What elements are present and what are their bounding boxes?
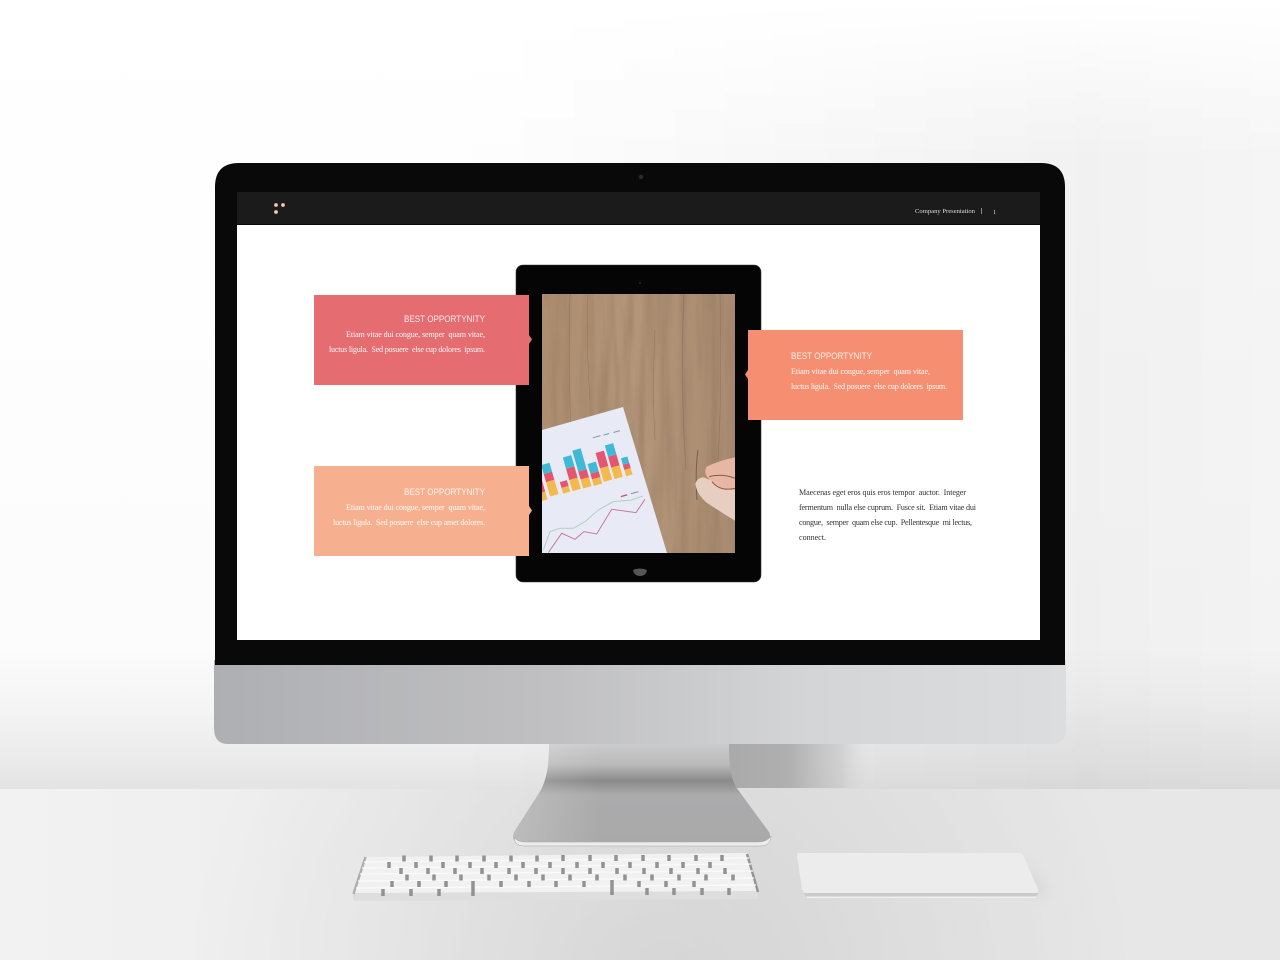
heading: BEST OPPORTYNITY: [791, 351, 872, 361]
logo dots: [274, 203, 285, 214]
trackpad: [797, 853, 1048, 898]
key gaps: [383, 855, 733, 896]
slide header bar: [237, 192, 1040, 224]
pointer: [529, 335, 532, 344]
text block: description: fermentum nulla else cuprum. Fusce sit. Etiam vitae dui: [799, 503, 977, 512]
monitor shadow on wall: [725, 744, 870, 788]
text block: description: congue, semper quam else cup. Pellentesque mi lectus,: [799, 518, 972, 527]
page number: 1: [993, 210, 996, 216]
body line 2: luctus ligula. Sed posuere else cup amet dolores.: [333, 518, 485, 527]
pointer: [745, 370, 748, 379]
background: wall tint on the right: [874, 103, 1280, 789]
monitor bezel: [215, 163, 1065, 665]
body line 2: luctus ligula. Sed posuere else cup dolores ipsum.: [329, 345, 485, 354]
panel: callout top left: [314, 295, 532, 385]
monitor chin: [214, 660, 1066, 744]
body line 1: Etiam vitae dui congue, semper quam vitae,: [346, 330, 485, 339]
paper line chart: [543, 496, 645, 553]
keyboard: [353, 853, 758, 901]
body line 2: luctus ligula. Sed posuere else cup dolores ipsum.: [791, 382, 947, 391]
background: desk: [0, 789, 1280, 960]
paper bars: [542, 443, 632, 501]
key row separators: [356, 858, 756, 888]
chart paper: [542, 407, 667, 553]
body line 1: Etiam vitae dui congue, semper quam vitae,: [346, 503, 485, 512]
monitor stand: [513, 744, 771, 846]
trackpad shadow: [1024, 860, 1048, 897]
body line 1: Etiam vitae dui congue, semper quam vitae,: [791, 367, 930, 376]
text block: description: [799, 488, 977, 542]
panel: callout right: [745, 330, 963, 420]
pointer: [529, 506, 532, 515]
webcam: [639, 175, 643, 179]
heading: BEST OPPORTYNITY: [404, 487, 485, 497]
header label: Company Presentation: [915, 208, 976, 215]
heading: BEST OPPORTYNITY: [404, 314, 485, 324]
panel: callout bottom left: [314, 466, 532, 556]
paper legend marks: [593, 430, 639, 497]
text block: description: Maecenas eget eros quis eros tempor auctor. Integer: [799, 488, 966, 497]
tablet: [516, 265, 761, 582]
tablet camera: [639, 282, 641, 284]
tablet home button: [633, 568, 647, 576]
hand: [695, 457, 735, 521]
slide canvas: [237, 225, 1040, 640]
desk shading: [0, 789, 1280, 960]
photo: wood desk with chart paper: [533, 294, 735, 553]
text block: description: connect.: [799, 533, 826, 542]
